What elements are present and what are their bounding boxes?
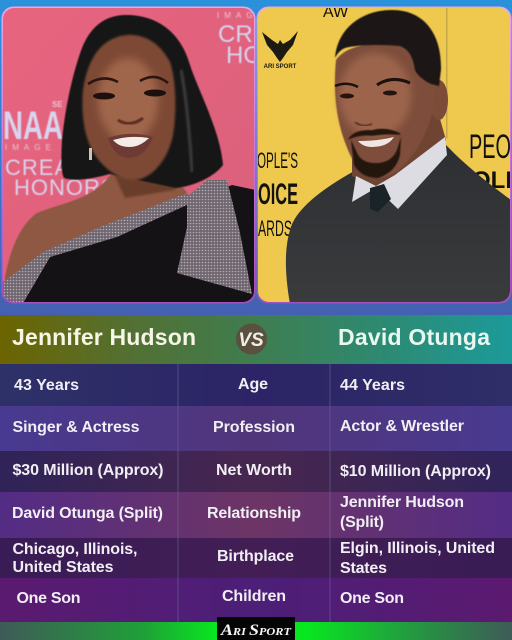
backdrop lettering, left: ARDS [258, 216, 292, 241]
face [82, 35, 175, 180]
backdrop lettering, left: OICE [258, 178, 298, 211]
backdrop lettering, left: AW [323, 4, 349, 21]
face highlight [339, 53, 411, 137]
row: profession: Singer & Actress [12, 419, 140, 436]
name: David Otunga: David Otunga [338, 324, 490, 350]
row: net worth: Net Worth [216, 462, 292, 479]
row: relationship: Relationship [207, 505, 301, 522]
backdrop lettering, left: HONORS [14, 175, 117, 200]
shoulder and neck [5, 172, 190, 282]
backdrop lettering, left [4, 100, 107, 196]
hair [61, 15, 223, 188]
row: birthplace: United States [12, 559, 114, 576]
panel: David Otunga photo [256, 4, 512, 304]
backdrop lettering, left [257, 4, 349, 241]
sequin bow [177, 180, 252, 294]
row: profession: Actor & Wrestler [340, 418, 464, 435]
Ari Sport eagle mark [262, 31, 298, 70]
row: profession: Profession [213, 419, 295, 436]
row: relationship: (Split) [340, 514, 384, 531]
backdrop lettering, left: IMAGE [5, 143, 56, 152]
row backgrounds [0, 364, 512, 622]
hair sheen [181, 70, 192, 172]
row: age: 43 Years [14, 377, 79, 394]
Ari Sport logo: ARI SPORT [220, 622, 292, 639]
face [335, 43, 435, 178]
backdrop lettering, left: CREA [5, 155, 70, 180]
backdrop lettering, right [470, 134, 510, 188]
row: children: Children [222, 588, 286, 605]
row: net worth: $10 Million (Approx) [340, 463, 491, 480]
backdrop lettering, left: SE [52, 100, 63, 109]
row: age: 44 Years [340, 377, 405, 394]
ear [432, 80, 448, 120]
row: children [16, 588, 404, 607]
VS badge: VS [238, 330, 264, 351]
Ari Sport eagle mark: ARI SPORT [264, 64, 297, 70]
row: relationship [12, 494, 464, 531]
row: birthplace: Elgin, Illinois, United [340, 540, 495, 557]
row: relationship: David Otunga (Split) [12, 505, 163, 522]
face highlight [98, 58, 158, 142]
page background [0, 0, 512, 316]
backdrop lettering, left: NAA [3, 104, 63, 148]
name: Jennifer Hudson: Jennifer Hudson [12, 324, 196, 350]
goatee and moustache [350, 130, 401, 178]
smile [108, 134, 153, 158]
sweater [286, 145, 511, 304]
panel: Jennifer Hudson photo [2, 6, 269, 304]
black dress [23, 185, 256, 304]
row: children: One Son [340, 590, 404, 607]
backdrop lettering, right: HO [226, 42, 262, 69]
bottom green bar [0, 622, 512, 640]
eyes and brows [335, 79, 410, 126]
comparison table [0, 315, 512, 622]
row: profession [12, 418, 464, 436]
row: birthplace [12, 540, 495, 577]
row: net worth: $30 Million (Approx) [12, 462, 164, 479]
smile [358, 137, 394, 147]
VS badge [236, 324, 267, 354]
shirt collar [352, 137, 447, 209]
row: relationship: Jennifer Hudson [340, 494, 464, 511]
earring [89, 148, 92, 160]
row: children: One Son [16, 590, 80, 607]
eyes and brows [88, 77, 168, 124]
hair [335, 10, 441, 86]
row: birthplace: States [340, 560, 387, 577]
neck [352, 112, 446, 186]
row: net worth [12, 462, 491, 480]
Ari Sport logo [217, 617, 295, 640]
backdrop lettering, left: OPLE'S [257, 148, 298, 173]
backdrop lettering, right [217, 12, 254, 64]
neck shadow [114, 175, 176, 198]
row: birthplace: Chicago, Illinois, [12, 541, 138, 558]
row: age [14, 376, 405, 394]
row: age: Age [238, 376, 268, 393]
header band [0, 315, 512, 364]
backdrop lettering, right: CRE [218, 21, 269, 48]
necktie [370, 184, 391, 212]
backdrop lettering, right: IMAGE [217, 11, 268, 20]
sequin strap [3, 193, 189, 303]
row: birthplace: Birthplace [217, 548, 294, 565]
